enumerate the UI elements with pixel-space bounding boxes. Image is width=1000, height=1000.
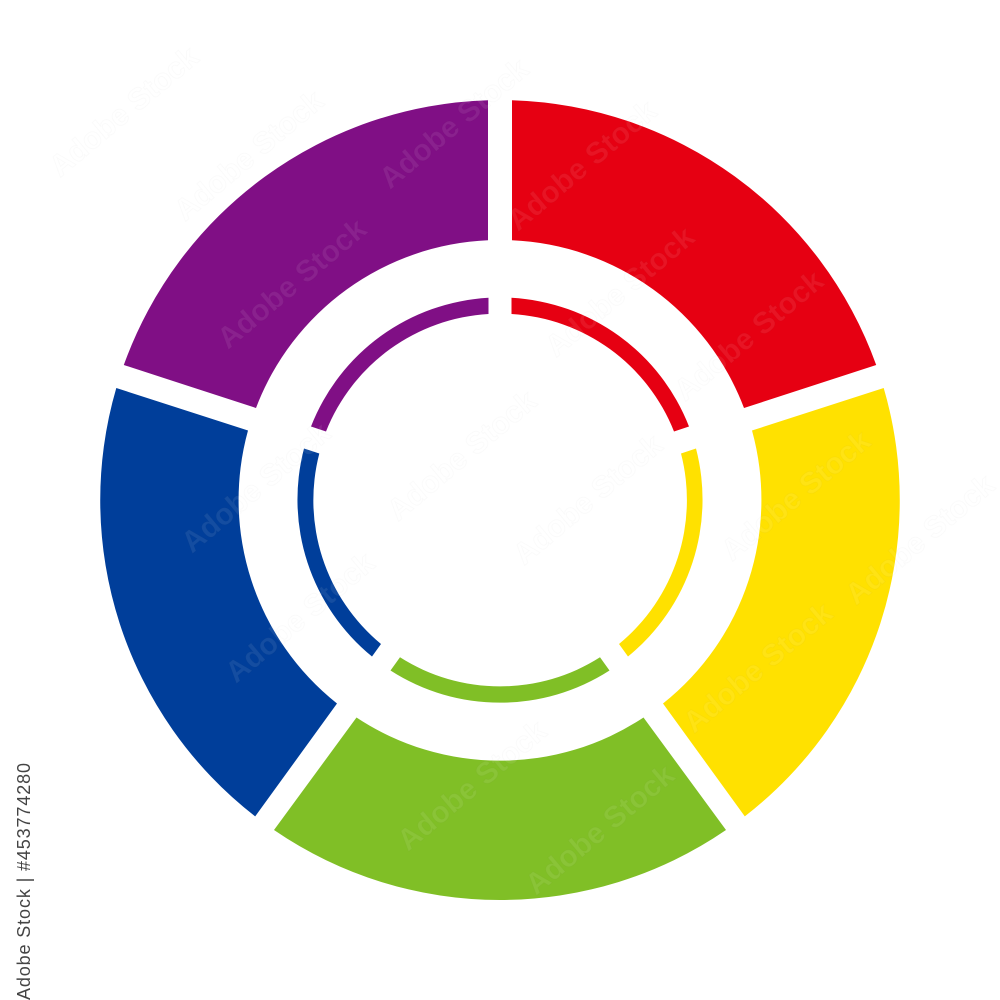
- arc: purple: [311, 298, 488, 432]
- watermark: repeated stock text: Adobe Stock: [373, 52, 535, 195]
- arc: blue: [297, 448, 381, 656]
- segment: blue: [100, 388, 337, 816]
- outer ring: five coloured segments: [100, 100, 900, 900]
- watermark: repeated stock text: Adobe Stock: [381, 384, 543, 527]
- arc: green: [390, 657, 610, 703]
- watermark: repeated stock text: Adobe Stock: [168, 84, 330, 227]
- watermark: repeated stock text: Adobe Stock: [539, 220, 701, 363]
- watermark: repeated stock text: Adobe Stock: [839, 468, 1000, 611]
- watermark: repeated stock text: Adobe Stock: [519, 758, 681, 901]
- watermark: repeated stock text: Adobe Stock: [668, 264, 830, 407]
- side credit text: Adobe Stock | #453774280: [14, 763, 34, 1000]
- segment: purple: [124, 100, 488, 408]
- inner ring: five thin coloured arcs: [297, 298, 703, 703]
- watermark: repeated stock text: Adobe Stock: [507, 428, 669, 571]
- watermark: repeated stock text: Adobe Stock: [715, 424, 877, 567]
- segment: green: [274, 718, 726, 900]
- arc: red: [512, 298, 689, 432]
- watermark: repeated stock text: Adobe Stock: [43, 40, 205, 183]
- watermark: repeated stock text: Adobe Stock: [219, 546, 381, 689]
- arc: yellow: [619, 448, 703, 656]
- watermark: repeated stock text: Adobe Stock: [391, 714, 553, 857]
- watermark: repeated stock text: Adobe Stock: [175, 416, 337, 559]
- watermark: repeated stock text: Adobe Stock: [677, 596, 839, 739]
- segment: red: [512, 100, 876, 408]
- watermark: repeated stock text: Adobe Stock: [211, 212, 373, 355]
- segment: yellow: [663, 388, 900, 816]
- watermark: repeated stock text: Adobe Stock: [501, 94, 663, 237]
